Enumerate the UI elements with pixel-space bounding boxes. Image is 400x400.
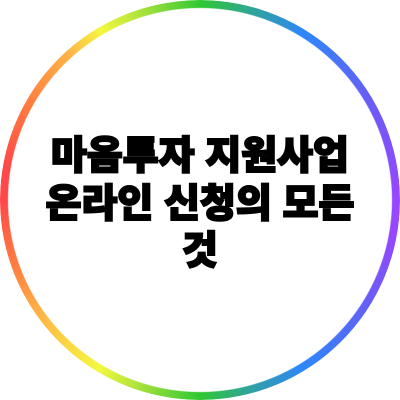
title: 마음투자 지원사업 xyxy=(51,135,349,178)
title: 온라인 신청의 모든 xyxy=(46,182,354,226)
title: 것 xyxy=(182,230,218,273)
title xyxy=(46,134,354,273)
